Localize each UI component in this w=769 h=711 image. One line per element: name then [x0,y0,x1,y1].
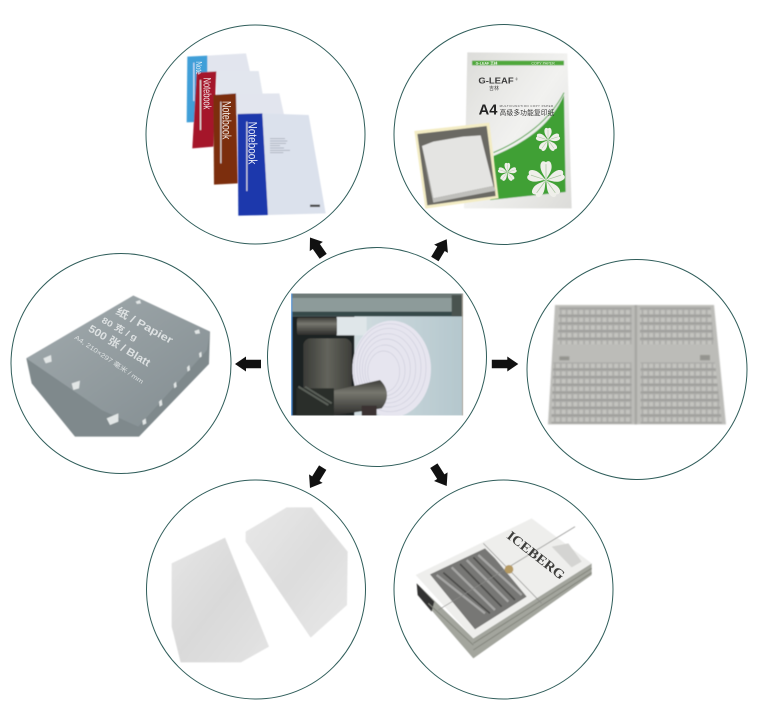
notebook stack image: Notebook [246,122,260,165]
magazine bundle: ICEBERG [504,528,568,582]
copy paper package: 吉林 [489,85,499,92]
panel: folded white sheets [146,480,366,699]
copy paper package: 高级多功能复印纸 [500,108,555,117]
panel: ICEBERG magazines [394,480,613,699]
panel: paper ream box [11,254,231,474]
copy paper package: G-LEAF [478,76,514,86]
notebook stack image: Note [194,61,204,75]
circle outline: ream [11,254,231,474]
panel: grid exercise book [527,260,747,480]
arrow: to exercise book [492,356,518,372]
notebook stack image: Notebook [200,78,212,110]
grey ream box [26,296,210,437]
magazine bundle [416,518,592,658]
copy paper package: ® [515,78,518,82]
notebook stack image [187,53,326,216]
copy paper package: COPY PAPER [531,62,555,66]
arrow: to white sheets [303,463,330,492]
copy paper package [414,52,572,209]
circle outline: exercise book [527,260,747,480]
circle outline: center [268,248,486,466]
arrow: to magazines [427,461,453,490]
circle outline: magazines [394,480,613,699]
circle outline: notebooks [146,25,365,244]
grey ream box: 纸 / Papier [114,305,175,347]
copy paper package: G-LEAF 吉林 [476,61,498,66]
circle outline: white sheets [146,480,366,699]
paper roll machine photo [291,293,463,417]
grey ream box: 500 张 / Blatt [86,322,153,370]
two white paper sheets [172,507,348,662]
grey ream box: 80 克 / g [100,314,140,343]
copy paper package: A4 [479,102,498,118]
panel: notebooks [146,25,365,244]
panel: central paper roll [268,248,486,466]
arrow: to ream [235,356,261,372]
arrow: to notebooks [303,233,330,261]
grey ream box: A4, 210×297 毫米 / mm [73,333,146,386]
copy paper package: MULTIFUNCTION COPY PAPER [500,104,553,108]
arrow: to copy paper [428,235,454,263]
open squared paper [548,305,726,424]
panel: G-LEAF copy paper [394,24,614,244]
notebook stack image: Notebook [220,101,234,140]
inset: paper sheets photo [414,123,499,209]
circle outline: copy paper [394,24,614,244]
